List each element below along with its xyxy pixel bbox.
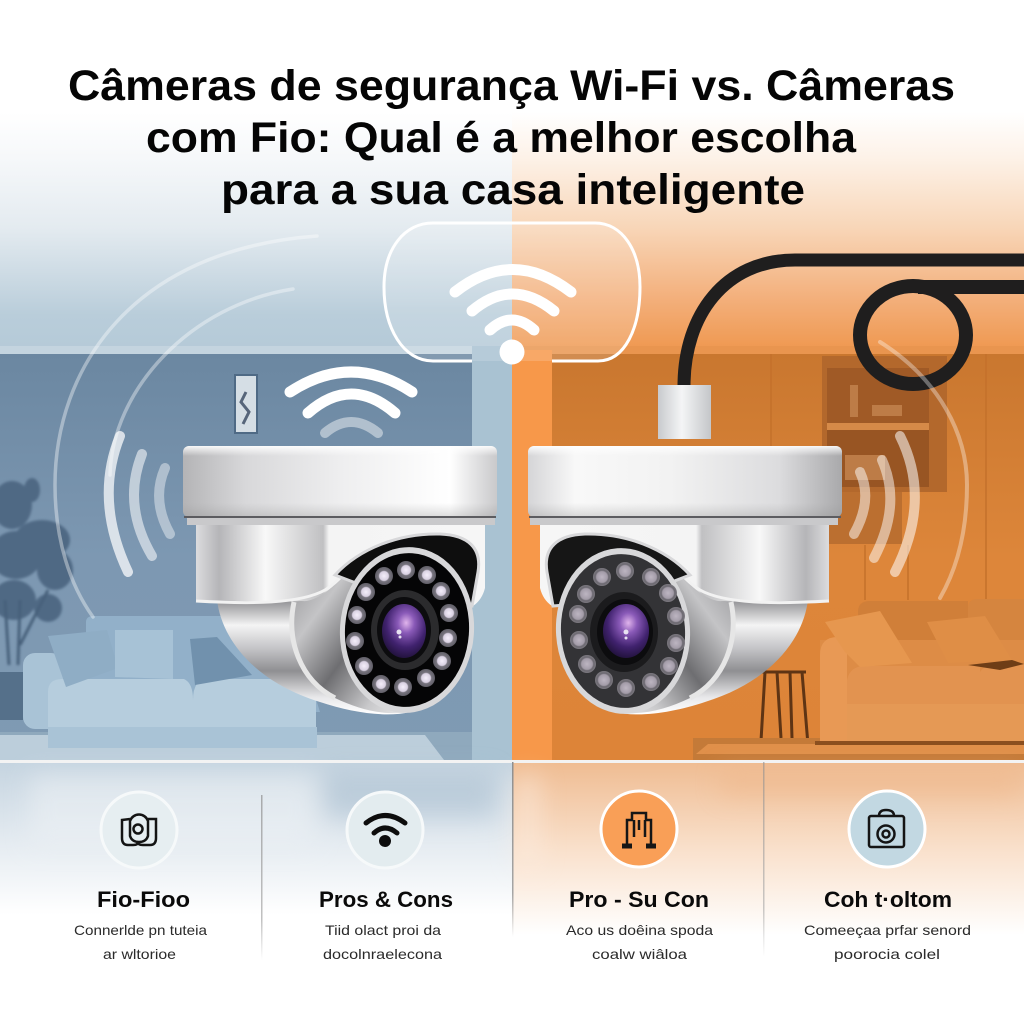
side table: [0, 672, 23, 720]
wired camera (right): [528, 385, 842, 718]
description: docolnraelecona: [323, 946, 442, 962]
description: Connerlde pn tuteia: [74, 922, 207, 938]
dividers: [261, 762, 764, 960]
description: Aco us doêina spoda: [566, 922, 713, 938]
heading: Pro - Su Con: [569, 887, 709, 912]
camera: lower dome: [615, 600, 808, 714]
title: [68, 62, 955, 214]
camera: skirt: [196, 523, 485, 606]
feature: Coh t-oltom: [804, 791, 971, 962]
icon: wifi: [347, 792, 423, 868]
description: Tiid olact proi da: [325, 922, 441, 938]
feature: Fio-Fioo: [74, 792, 207, 962]
icon: lock camera: [849, 791, 925, 867]
icon: camera mount: [101, 792, 177, 868]
title: Câmeras de segurança Wi-Fi vs. Câmeras: [68, 62, 955, 110]
panel: left living room: [0, 346, 512, 760]
camera: silver collar: [291, 552, 410, 713]
floor and rug: [0, 732, 472, 760]
description: [323, 922, 442, 962]
icon: right side signal waves: [854, 436, 915, 572]
panel: bottom right reflection band: [512, 762, 1024, 1024]
signal arc: right large: [880, 342, 967, 598]
camera: top ring: [183, 446, 497, 525]
cable with loop: [684, 260, 1024, 386]
floor: [693, 738, 1024, 760]
wifi bubble: [384, 223, 640, 361]
feature: Pro - Su Con: [566, 791, 713, 962]
panel: bottom left reflection band: [0, 762, 512, 1024]
camera: top ring: [528, 446, 842, 525]
title: com Fio: Qual é a melhor escolha: [146, 114, 857, 162]
camera: skirt: [540, 523, 829, 606]
camera: black hood: [546, 534, 690, 606]
icon: cable connectors: [601, 791, 677, 867]
signal arcs: left large: [55, 236, 317, 617]
background: left sky gradient: [0, 0, 512, 350]
camera: lens face: [556, 550, 690, 712]
band top highlight: [0, 760, 1024, 763]
description: [804, 922, 971, 962]
icon: left side signal waves: [109, 436, 170, 572]
sofa: [815, 599, 1024, 745]
background: right sky gradient: [512, 0, 1024, 350]
camera: silver collar: [615, 552, 734, 713]
tree: [0, 478, 73, 665]
sofa: [23, 616, 320, 748]
camera: lens face: [334, 543, 480, 717]
wifi camera (left): [183, 446, 497, 717]
heading: Pros & Cons: [319, 887, 453, 912]
icon: left wifi signal above camera: [290, 372, 412, 433]
side table: [760, 672, 808, 745]
camera: infrared LEDs: [346, 561, 458, 696]
description: poorocia colel: [834, 946, 940, 962]
camera: lens: [371, 590, 439, 670]
heading: Fio-Fioo: [97, 887, 190, 912]
camera: cable connector: [658, 385, 711, 439]
camera: lower dome: [217, 600, 410, 714]
title: para a sua casa inteligente: [221, 166, 805, 214]
camera: lens housing rim: [550, 544, 696, 718]
camera: infrared LEDs: [569, 562, 685, 697]
panel: right living room: [512, 346, 1024, 760]
heading: Coh t·oltom: [824, 887, 952, 912]
description: [74, 922, 207, 962]
wall art: [234, 374, 258, 434]
feature: Pros & Cons: [319, 792, 453, 962]
description: ar wltorioe: [103, 946, 176, 962]
description: Comeeçaa prfar senord: [804, 922, 971, 938]
camera: black hood: [335, 534, 479, 606]
shelf: [822, 356, 947, 544]
camera: lens: [590, 592, 658, 672]
description: [566, 922, 713, 962]
description: coalw wiâloa: [592, 946, 687, 962]
icon: central wifi symbol: [455, 270, 571, 364]
wall panels: [771, 354, 986, 600]
